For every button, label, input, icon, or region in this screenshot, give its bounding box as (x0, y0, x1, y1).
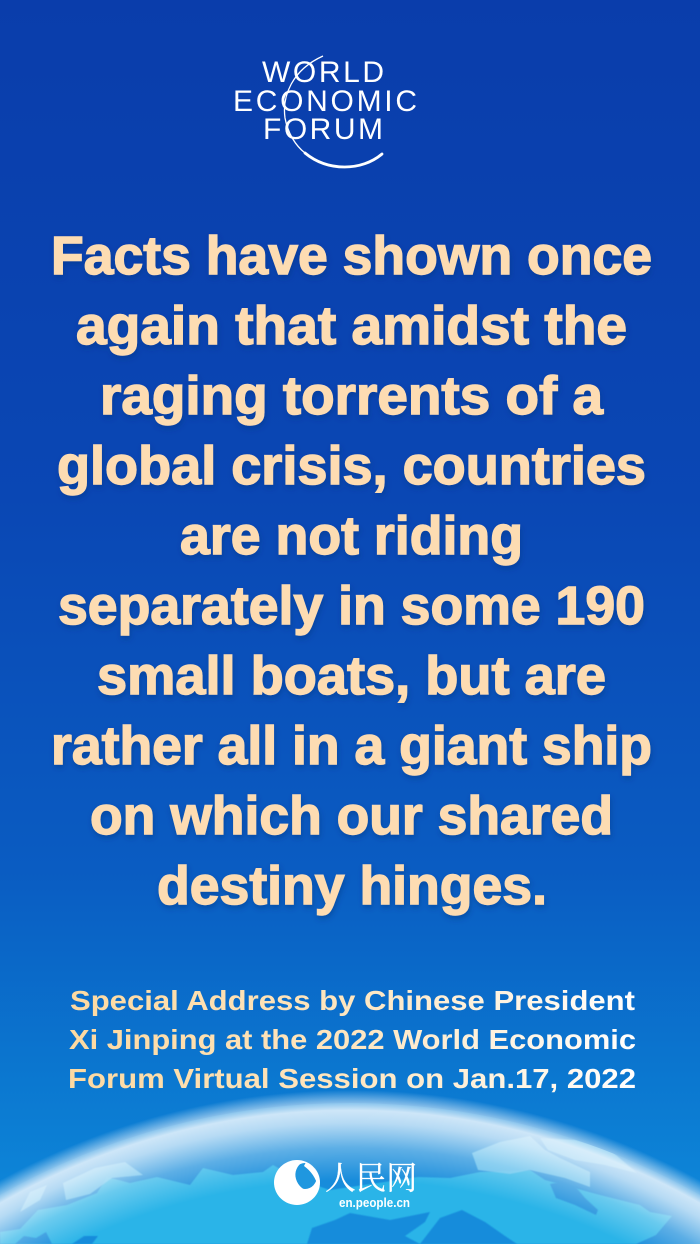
attribution text (68, 985, 636, 1094)
headline quote: raging torrents of a (100, 366, 604, 426)
wordmark: 人民网 (325, 1160, 417, 1196)
headline quote: are not riding (180, 506, 523, 566)
headline quote: small boats, but are (97, 646, 606, 706)
headline quote: rather all in a giant ship (51, 716, 652, 776)
headline quote: again that amidst the (76, 296, 627, 356)
headline quote (51, 226, 652, 916)
attribution text: Forum Virtual Session on Jan.17, 2022 (68, 1063, 636, 1094)
globe with atmosphere glow (0, 1085, 700, 1244)
attribution text: Xi Jinping at the 2022 World Economic (69, 1024, 636, 1055)
attribution text: Special Address by Chinese President (70, 985, 635, 1016)
logo arc (284, 56, 323, 153)
headline quote: destiny hinges. (157, 856, 547, 916)
logo wordmark: FORUM (263, 113, 383, 146)
map: pale islands and Greenland (20, 1136, 637, 1212)
logo wordmark: ECONOMIC (233, 85, 417, 118)
icon: crescent swirl (274, 1160, 320, 1205)
logo wordmark: WORLD (262, 56, 384, 89)
logo: People's Daily Online (274, 1160, 417, 1210)
headline quote: separately in some 190 (58, 576, 645, 636)
globe rim highlight (0, 1085, 700, 1244)
headline quote: global crisis, countries (57, 436, 646, 496)
headline quote: Facts have shown once (51, 226, 652, 286)
url: en.people.cn (339, 1196, 410, 1210)
map: dark seas (15, 1180, 598, 1244)
logo: World Economic Forum (233, 56, 417, 167)
headline quote: on which our shared (90, 786, 613, 846)
map: main landmass (0, 1165, 672, 1244)
logo wordmark (233, 56, 417, 146)
